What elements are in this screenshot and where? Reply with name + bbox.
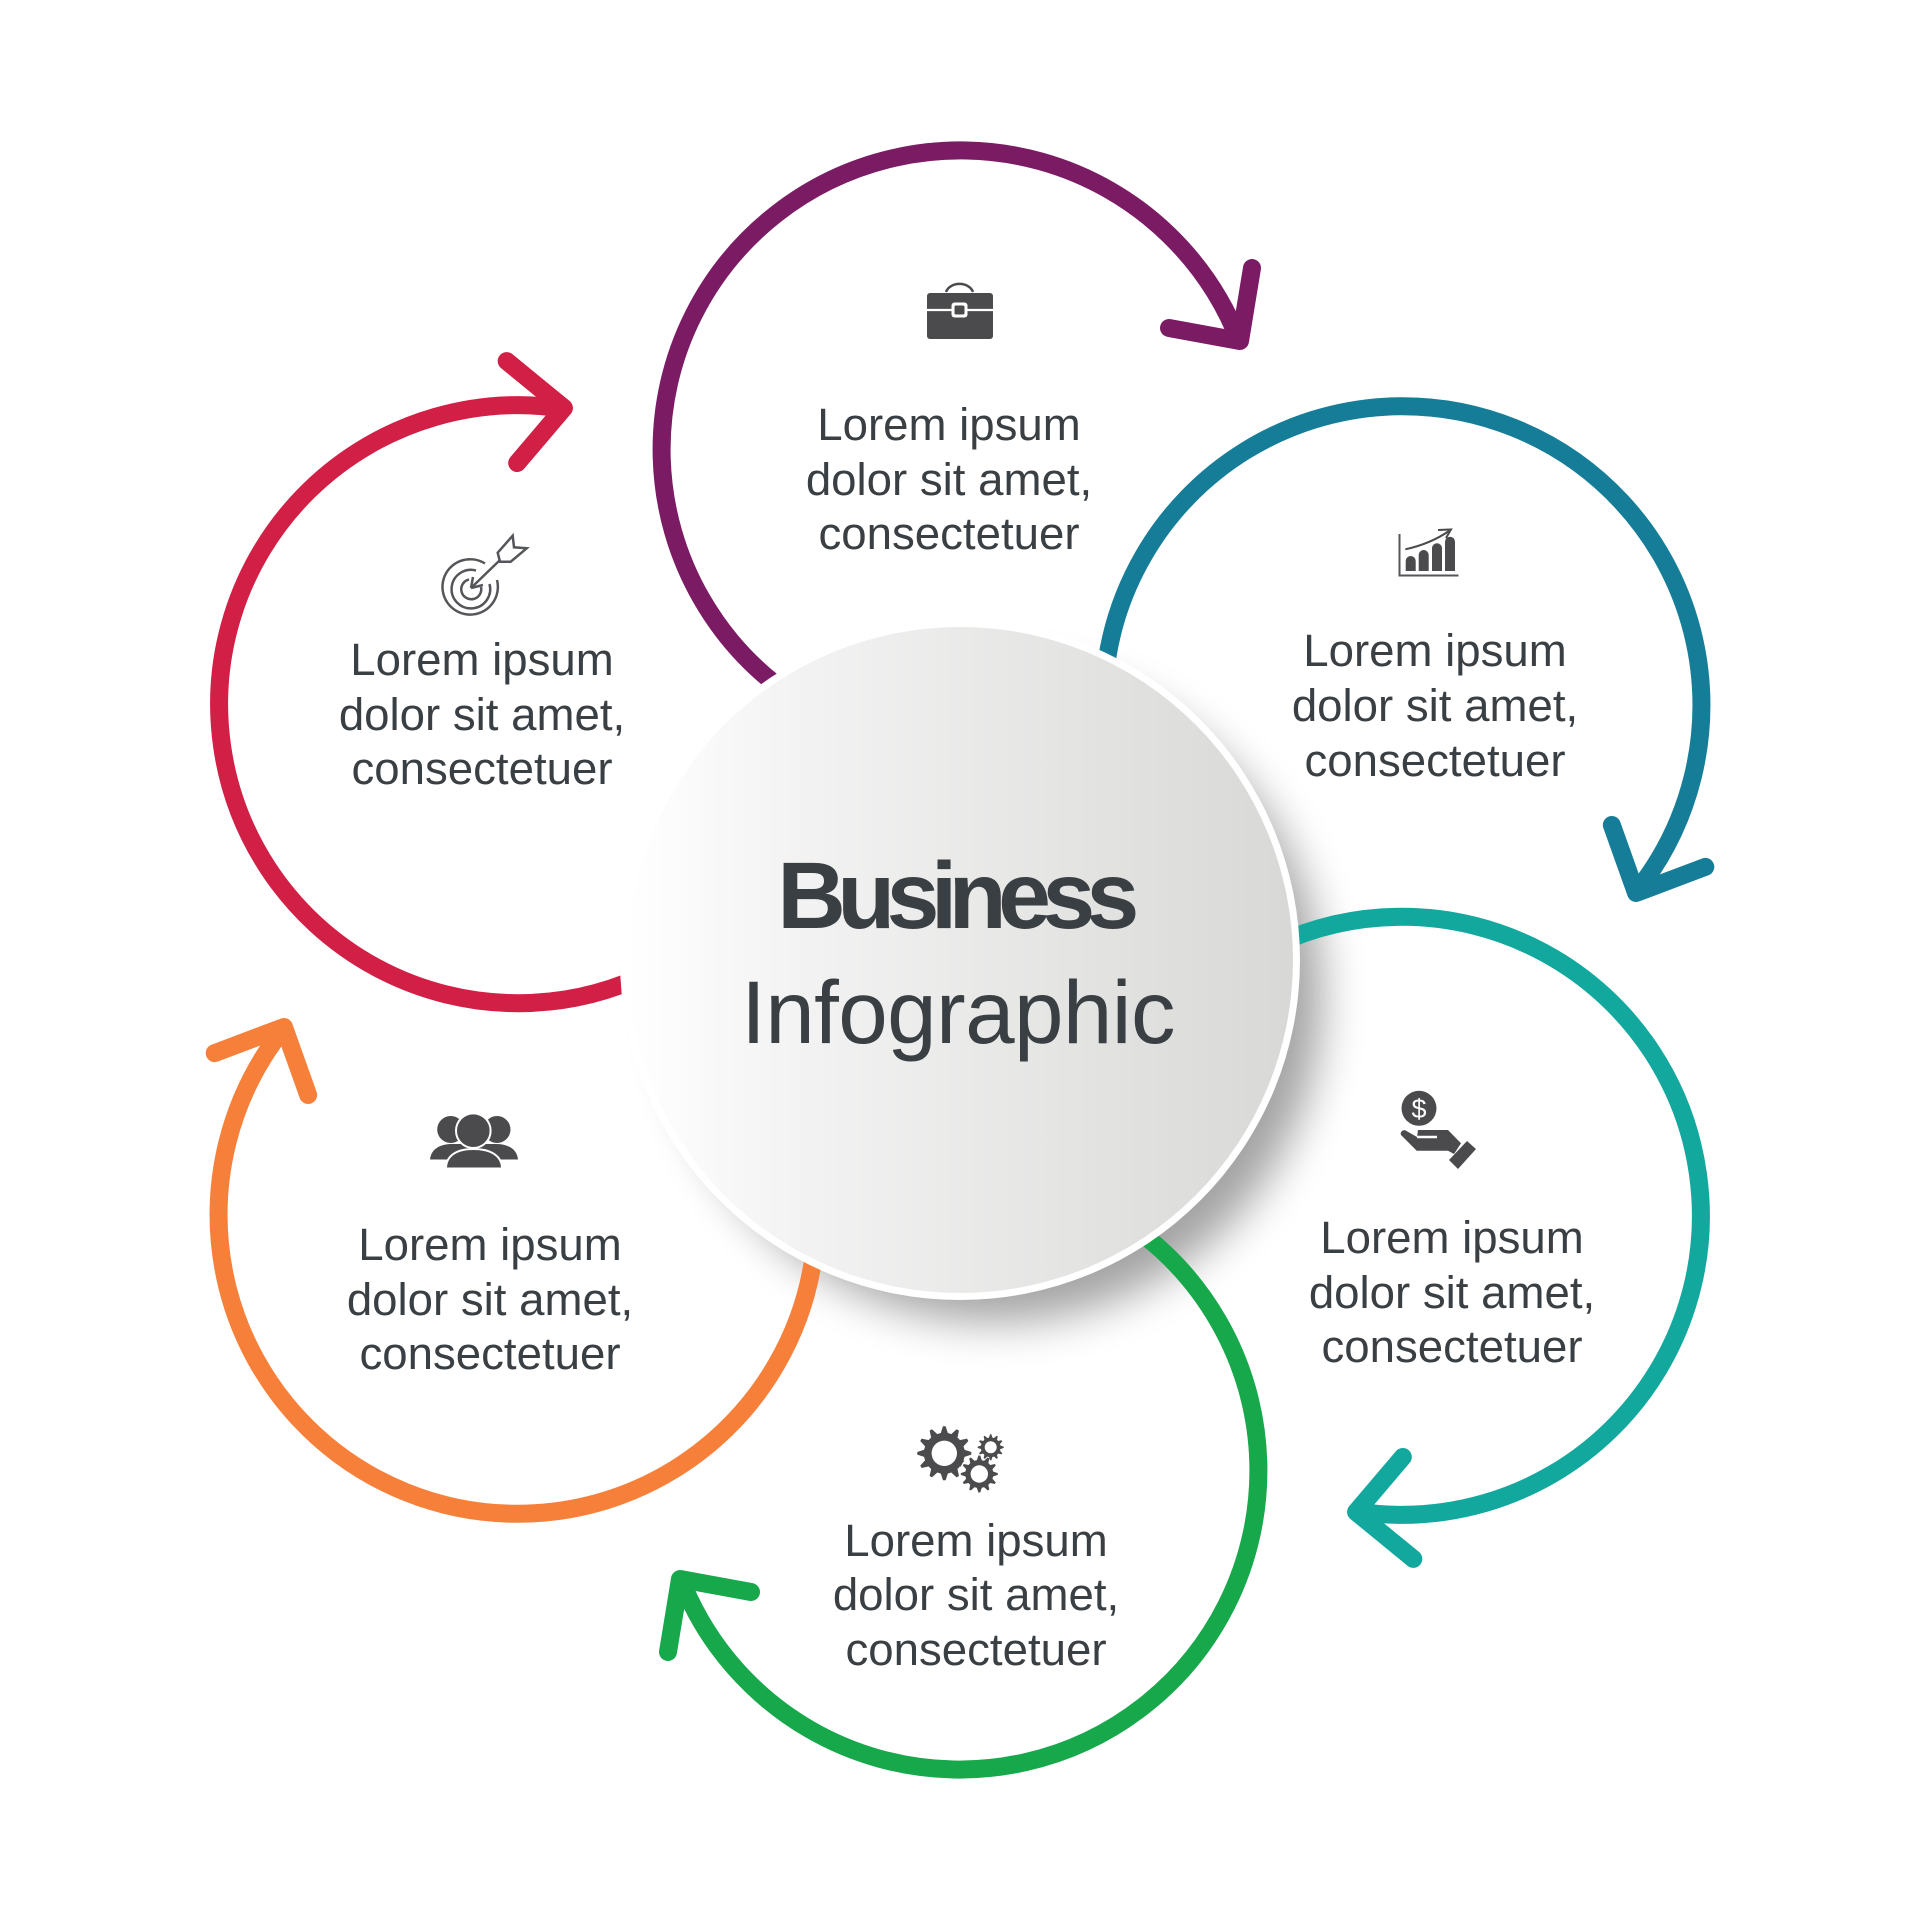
text: red step: dolor sit amet, xyxy=(339,689,625,740)
title: Business xyxy=(777,843,1136,949)
icon: gears xyxy=(917,1426,1004,1494)
text: red step: consectetuer xyxy=(351,743,613,794)
icon: briefcase xyxy=(927,284,993,339)
title xyxy=(741,843,1175,1062)
arrow arc: red xyxy=(110,302,877,1086)
icon: bar chart xyxy=(1400,530,1458,576)
text: blue step: dolor sit amet, xyxy=(1292,680,1578,731)
arrow arc: teal xyxy=(1043,834,1810,1618)
text: green step: Lorem ipsum xyxy=(844,1515,1108,1566)
arrow arc: green xyxy=(668,1225,1258,1770)
title: Infographic xyxy=(741,962,1175,1062)
text: green step: consectetuer xyxy=(845,1624,1107,1675)
icon: target with dart xyxy=(442,536,527,615)
text: orange step: consectetuer xyxy=(359,1328,621,1379)
icon: people xyxy=(430,1113,518,1172)
text: blue step: Lorem ipsum xyxy=(1303,625,1567,676)
arrow arc: orange xyxy=(113,840,880,1623)
text: blue step: consectetuer xyxy=(1304,735,1566,786)
icon: hand with coin xyxy=(1401,1091,1476,1169)
shadow of centre disc xyxy=(670,670,1322,1322)
text: teal step: dolor sit amet, xyxy=(1309,1267,1595,1318)
text: teal step: Lorem ipsum xyxy=(1320,1212,1584,1263)
arrow arc: blue xyxy=(1040,297,1807,1080)
text: orange step: dolor sit amet, xyxy=(347,1274,633,1325)
text: red step: Lorem ipsum xyxy=(350,634,614,685)
centre disc xyxy=(620,620,1300,1300)
text: orange step: Lorem ipsum xyxy=(358,1219,622,1270)
text: green step: dolor sit amet, xyxy=(833,1569,1119,1620)
text: purple step: dolor sit amet, xyxy=(806,454,1092,505)
text: purple step: Lorem ipsum xyxy=(817,399,1081,450)
text: teal step: consectetuer xyxy=(1321,1321,1583,1372)
arrow arc: purple xyxy=(662,150,1252,695)
text: purple step: consectetuer xyxy=(818,508,1080,559)
icon: hand with coin: $ xyxy=(1411,1094,1427,1124)
